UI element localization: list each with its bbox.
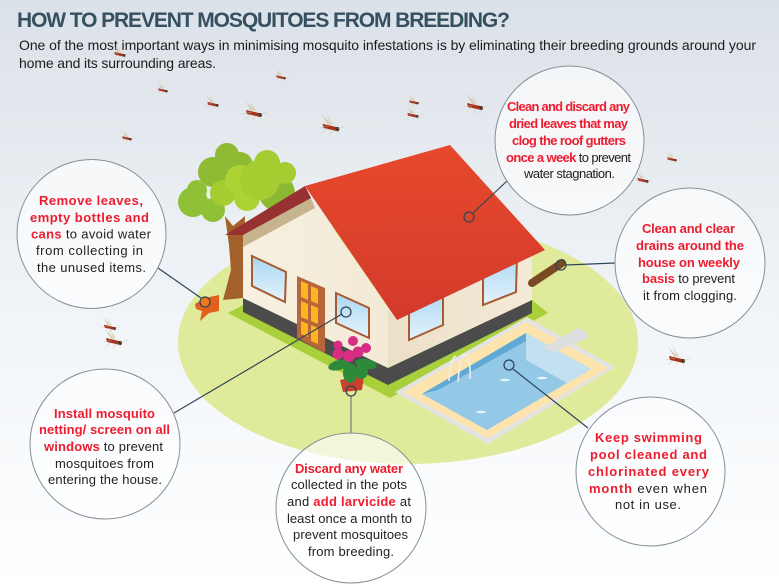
roof: [305, 145, 545, 320]
window 3: [409, 290, 443, 340]
callout: drains: basis to prevent: [642, 271, 735, 286]
callout: swimming pool: Keep swimming: [595, 430, 702, 445]
callout: window netting: netting/ screen on all: [39, 422, 170, 437]
window 2: [336, 293, 369, 338]
house: [225, 145, 562, 398]
lawn: [178, 220, 638, 464]
right wall: [388, 250, 532, 368]
callout lines: [158, 181, 615, 433]
pool highlights: [476, 377, 547, 413]
callout: leaves and bottles: Remove leaves,: [39, 193, 143, 208]
callout: roof gutters: [495, 66, 644, 215]
leaves: [327, 357, 378, 383]
callout: swimming pool: pool cleaned and: [590, 447, 707, 462]
callout: window netting: mosquitoes from: [55, 456, 154, 471]
pool ladder: [449, 355, 470, 382]
window 1: [252, 256, 286, 302]
title: HOW TO PREVENT MOSQUITOES FROM BREEDING?: [17, 9, 510, 32]
callout: swimming pool: chlorinated every: [588, 464, 710, 479]
window 4: [483, 255, 517, 305]
callout: leaves and bottles: cans to avoid water: [31, 226, 152, 242]
callout: leaves and bottles: empty bottles and: [30, 210, 149, 225]
callout: drains: Clean and clear: [642, 221, 735, 236]
intro text: home and its surrounding areas.: [19, 55, 216, 71]
mosquitoes: [102, 44, 691, 367]
intro text: One of the most important ways in minimising mosquito infestations is by eliminating their breeding grounds around your: [19, 37, 756, 53]
callout: pots: Discard any water: [295, 461, 403, 476]
callout: roof gutters: Clean and discard any: [507, 99, 631, 114]
callout: leaves and bottles: from collecting in: [36, 243, 143, 258]
gable shade: [243, 196, 315, 247]
callout: swimming pool: [576, 397, 725, 546]
pool side wall: [526, 333, 591, 383]
pool deck: [395, 317, 615, 444]
callout: pots: prevent mosquitoes: [293, 527, 408, 542]
leaf: [195, 295, 219, 321]
callout: drains: house on weekly: [638, 255, 741, 270]
lawn pad: [228, 300, 548, 398]
pool sand: [403, 322, 608, 438]
door: [297, 276, 325, 353]
callout: pots: from breeding.: [308, 544, 394, 559]
pool water: [422, 333, 591, 430]
callout: swimming pool: month even when: [589, 481, 707, 496]
callout: leaves and bottles: the unused items.: [37, 260, 146, 275]
gutter pipe: [532, 263, 562, 283]
left wall: [243, 196, 388, 368]
callout: window netting: Install mosquito: [54, 406, 155, 421]
callout: pots: collected in the pots: [291, 477, 408, 492]
callout: roof gutters: clog the roof gutters: [512, 133, 626, 148]
flower pot: [327, 336, 378, 392]
callout: pots: [276, 433, 426, 583]
callout: drains: [615, 188, 765, 338]
callout: pots: least once a month to: [287, 511, 412, 526]
tree: [178, 143, 296, 300]
pot: [340, 375, 364, 392]
callout: window netting: windows to prevent: [43, 439, 163, 454]
base: [243, 298, 532, 385]
intro text: [19, 37, 756, 71]
callout: swimming pool: not in use.: [615, 497, 681, 512]
diving board: [543, 328, 588, 352]
pool: [395, 317, 615, 444]
callout: leaves and bottles: [17, 160, 166, 308]
callout: drains: drains around the: [636, 238, 744, 253]
callout: pots: and add larvicide at: [287, 494, 411, 509]
tree trunk: [223, 216, 245, 300]
blooms: [332, 336, 371, 362]
callout: roof gutters: dried leaves that may: [509, 116, 629, 131]
callout markers: [200, 212, 566, 396]
callout: roof gutters: once a week to prevent: [506, 150, 631, 165]
pool near wall: [422, 333, 526, 394]
callout: window netting: [30, 369, 180, 519]
gable trim: [225, 186, 311, 235]
callout: roof gutters: water stagnation.: [523, 166, 615, 181]
callout: window netting: entering the house.: [48, 472, 162, 487]
callout: drains: it from clogging.: [643, 288, 737, 303]
